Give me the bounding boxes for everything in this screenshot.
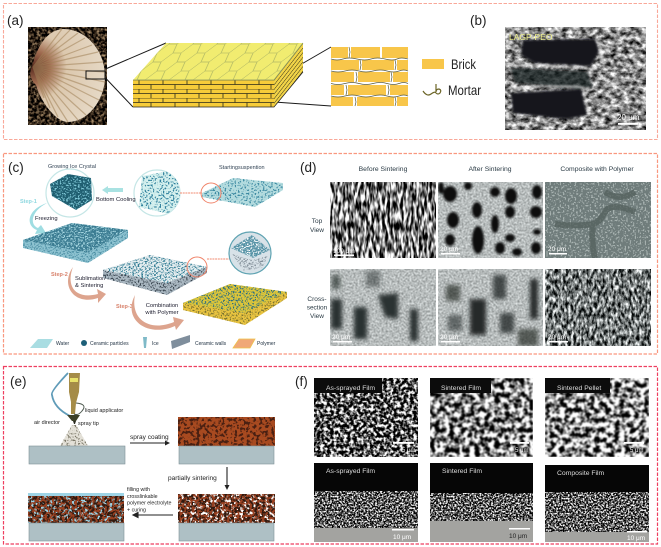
diagram: brick and mortar close-up	[331, 47, 408, 106]
column heading: before sintering: Before Sintering	[359, 166, 408, 173]
panel: ice templating (c, d)	[4, 154, 658, 354]
row label: cross-section view: View	[310, 313, 324, 320]
SEM image: LAGP-PEO: LAGP-PEO	[509, 32, 553, 42]
legend: mortar: Mortar	[448, 82, 481, 98]
arrow: step 3	[132, 295, 184, 330]
label (b): (b)	[470, 13, 486, 28]
substrate 1	[29, 446, 125, 464]
zoom lines from shell to block	[106, 43, 331, 107]
step 1 label: Step-1	[20, 199, 37, 205]
text: filling and curing: filling with	[127, 487, 150, 493]
SEM: after sintering cross-section: 20 μm	[440, 334, 458, 341]
heading: growing ice crystal: Growing Ice Crystal	[48, 164, 96, 170]
film: as sprayed particles	[178, 417, 275, 446]
SEM: as-sprayed film top: As-sprayed Film	[326, 385, 375, 392]
label (e): (e)	[10, 374, 26, 389]
detail circle: ceramic walls	[229, 232, 271, 274]
SEM: after sintering cross-section	[438, 269, 543, 346]
row label: top view: View	[310, 227, 324, 234]
label: air director: air director	[34, 420, 60, 426]
film: partially sintered	[178, 494, 275, 523]
spray cone	[60, 425, 88, 446]
magnifier circle 1	[201, 183, 221, 203]
arrow: freezing	[30, 203, 47, 234]
SEM: as-sprayed film cross-section: 10 μm	[393, 534, 411, 541]
arrow: spray coating: spray coating	[130, 434, 169, 441]
text: filling and curing: crosslinkable	[127, 494, 158, 500]
step 2 label: Step-2	[51, 272, 68, 278]
arrow: spray coating	[130, 434, 170, 446]
SEM: as-sprayed film cross-section	[314, 463, 418, 542]
SEM: sintered film cross-section: Sintered Film	[442, 468, 482, 475]
SEM: before sintering cross-section	[330, 269, 436, 346]
detail circle: starting suspension	[134, 170, 180, 216]
connector to slab	[180, 192, 202, 194]
SEM: after sintering top view	[438, 182, 543, 258]
panel: spray coating (e, f)	[4, 366, 658, 544]
label (f): (f)	[295, 374, 308, 389]
SEM: as-sprayed film top	[314, 378, 418, 457]
text: combination with polymer: Combination	[146, 303, 178, 309]
label: spray tip: spray tip	[78, 421, 99, 427]
row label: cross-section view: Cross-	[307, 296, 327, 303]
label (a): (a)	[7, 13, 24, 28]
legend: brick: Brick	[451, 56, 477, 72]
SEM: composite top view	[545, 182, 651, 258]
text: combination with polymer: with Polymer	[144, 310, 179, 316]
arrow: filling	[133, 512, 173, 518]
SEM: sintered film cross-section: 10 μm	[509, 533, 527, 540]
legend: materials: Ceramic particles	[90, 341, 129, 347]
SEM: composite cross-section	[545, 269, 651, 346]
legend: materials: Ceramic walls	[195, 341, 227, 347]
text: sublimation and sintering: & Sintering	[75, 283, 103, 289]
SEM: after sintering top view: 20 μm	[440, 246, 458, 253]
SEM: composite cross-section: 20 μm	[548, 334, 566, 341]
panel: nacre structure (a, b)	[4, 4, 658, 140]
SEM: as-sprayed film top: 5 μm	[402, 448, 415, 454]
SEM: sintered film top	[430, 378, 533, 457]
row label: cross-section view: section	[307, 304, 328, 312]
SEM: sintered film top: 5 μm	[515, 448, 528, 454]
SEM: before sintering top view	[330, 182, 436, 258]
diagram: brick and mortar block	[133, 43, 303, 107]
step 3 label: Step-3	[116, 304, 133, 310]
text: sublimation and sintering: Sublimation	[75, 276, 105, 282]
text: bottom cooling: Bottom Cooling	[96, 197, 136, 203]
slab: polymer composite	[183, 284, 287, 325]
row label: top view: Top	[312, 218, 323, 225]
SEM: before sintering top view: 100 μm	[333, 248, 355, 255]
photo: scallop shell	[28, 27, 107, 125]
SEM: sintered pellet top: 5 μm	[630, 448, 643, 454]
film: composite with polymer	[28, 493, 124, 523]
detail circle: growing ice crystal	[46, 169, 94, 217]
slab: starting suspension	[202, 178, 283, 207]
SEM: sintered film cross-section	[430, 463, 533, 542]
connector to walls detail	[207, 258, 230, 260]
SEM: sintered film top: Sintered Film	[441, 385, 481, 392]
SEM: composite film cross-section: Composite Film	[557, 470, 605, 477]
column heading: after sintering: After Sintering	[468, 166, 512, 173]
label (d): (d)	[300, 160, 316, 175]
legend: materials: Polymer	[257, 341, 276, 347]
text: freezing: Freezing	[35, 216, 58, 222]
SEM image: LAGP-PEO	[505, 27, 646, 130]
label (c): (c)	[8, 160, 24, 175]
SEM image: LAGP-PEO: 20 μm	[617, 113, 640, 122]
SEM: composite top view: 20 μm	[548, 246, 566, 253]
SEM: composite film cross-section: 10 μm	[627, 535, 645, 542]
column heading: composite with polymer: Composite with Polymer	[560, 166, 634, 173]
legend: mortar	[423, 82, 481, 98]
arrow: partially sintering: partially sintering	[168, 475, 217, 482]
text: filling and curing: + curing	[127, 507, 146, 513]
heading: starting suspension: Startingsuspention	[219, 165, 265, 171]
legend: materials	[30, 335, 276, 349]
slab: ceramic walls	[103, 255, 207, 295]
legend: materials: Water	[56, 341, 69, 347]
magnifier circle 2	[187, 257, 207, 277]
SEM: as-sprayed film cross-section: As-sprayed Film	[326, 468, 375, 475]
legend: brick	[422, 56, 477, 72]
substrate 4	[29, 523, 124, 541]
text: filling and curing: polymer electrolyte	[127, 501, 172, 507]
arrow: step 2	[68, 267, 106, 303]
label: liquid applicator: liquid applicator	[85, 408, 123, 414]
legend: materials: Ice	[152, 341, 159, 347]
SEM: composite film cross-section	[545, 465, 649, 542]
SEM: before sintering cross-section: 20 μm	[332, 334, 350, 341]
arrow: bottom cooling	[102, 186, 123, 194]
substrate 3	[179, 523, 274, 541]
slab: frozen ice walls	[23, 223, 128, 263]
SEM: sintered pellet top: Sintered Pellet	[557, 385, 601, 392]
substrate 2	[179, 446, 274, 464]
icon: spray gun	[52, 373, 84, 424]
arrow: partially sintering	[168, 467, 230, 490]
SEM: sintered pellet top	[545, 378, 649, 457]
